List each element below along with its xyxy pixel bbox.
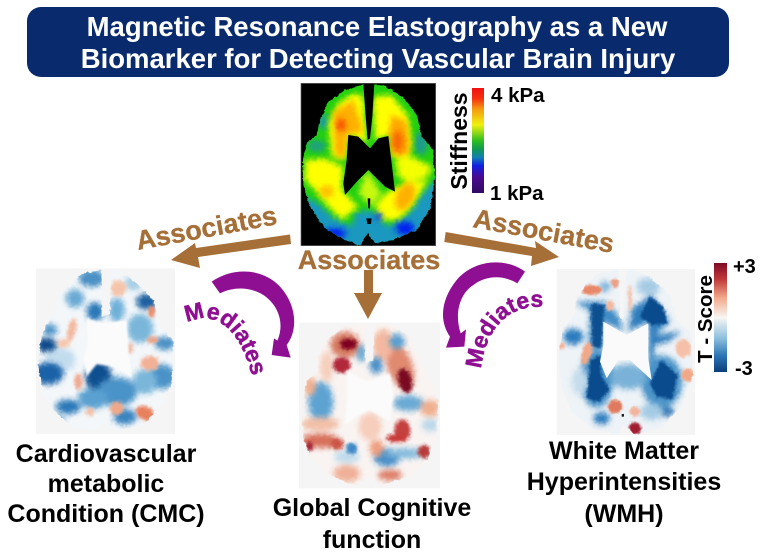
curved arrow: mediates right: [443, 262, 525, 348]
label: associates left: Associates: [134, 200, 279, 256]
label: global cognitive function: function: [323, 526, 421, 554]
label: WMH: (WMH): [584, 500, 664, 528]
label: global cognitive function: Global Cognitive: [273, 494, 471, 522]
label: CMC: [7, 440, 205, 528]
label: WMH: [527, 437, 721, 528]
label: CMC: Cardiovascular: [16, 440, 197, 468]
label: WMH: Hyperintensities: [527, 468, 721, 496]
stiffness colour bar: 1 kPa: [490, 182, 544, 205]
brain map: CMC: [33, 268, 176, 434]
label: associates right: Associates: [471, 203, 617, 259]
label: WMH: White Matter: [549, 437, 699, 465]
arrow: stiffness to CMC: [171, 234, 291, 268]
title banner: Magnetic Resonance Elastography as a New: [87, 11, 668, 42]
T-score colour bar: [694, 256, 756, 380]
stiffness colour bar: Stiffness: [446, 92, 472, 190]
title banner: [27, 7, 729, 77]
stiffness colour bar: 4 kPa: [491, 84, 545, 107]
curved arrow: mediates left: [212, 272, 294, 358]
label: mediates left: Mediates: [184, 302, 263, 375]
label: CMC: Condition (CMC): [7, 500, 205, 528]
title banner: Biomarker for Detecting Vascular Brain Injury: [81, 43, 676, 74]
T-score colour bar: +3: [733, 256, 756, 278]
brain map: WMH: [557, 269, 695, 435]
brain map: global cognitive function: [299, 323, 440, 488]
stiffness colour bar: [446, 84, 545, 205]
label: mediates right: Mediates: [465, 294, 543, 368]
T-score colour bar: -3: [735, 358, 753, 380]
T-score colour bar: T - Score: [694, 275, 717, 363]
brain stiffness map: [301, 83, 438, 253]
arrow: stiffness to cognition: [354, 270, 382, 319]
arrow: stiffness to WMH: [444, 232, 559, 266]
label: global cognitive function: [273, 494, 471, 554]
label: CMC: metabolic: [48, 470, 164, 498]
label: associates centre: Associates: [298, 245, 440, 275]
